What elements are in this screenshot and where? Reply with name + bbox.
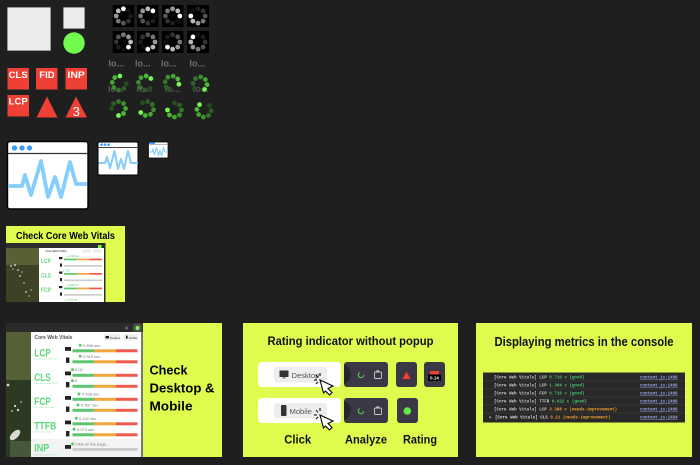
loading labels row 1: lo... [135, 58, 150, 68]
console log: content.js:1494 [640, 416, 678, 420]
loading labels row 2: lo... [193, 84, 208, 94]
console log: content.js:1496 [640, 376, 678, 380]
console log: content.js:1496 [640, 408, 678, 412]
metric values: 0.896 sec [83, 343, 100, 348]
icon: INP badge: INP [67, 70, 85, 80]
metrics popup: Core Web Vitals [34, 335, 73, 341]
metric labels: TTFB [34, 420, 56, 432]
icon: FID badge: FID [39, 70, 55, 80]
metric values: 0.457 sec [81, 402, 98, 408]
icon: CLS badge [8, 68, 29, 90]
panel: rating indicator without popup [243, 323, 458, 457]
metric values: 0.538 sec [82, 392, 99, 396]
loading labels row 2: lo... [164, 84, 180, 94]
metric sublabels [34, 358, 58, 456]
icon: LCP badge [8, 95, 29, 116]
icon: red triangle with number: 3 [73, 104, 80, 119]
panel: check core web vitals: CLS [41, 272, 51, 280]
icon: cursor on desktop button [314, 373, 333, 395]
console log: [Core Web Vitals] FCP 0.716 с (good) [494, 392, 584, 396]
panel: check core web vitals: ● 0.00 [63, 270, 70, 272]
label: rating: Rating [403, 434, 437, 446]
icon: red triangle [36, 96, 58, 118]
metric sublabels: Time to First Byte [34, 430, 52, 434]
icon: cursor on mobile button [314, 408, 333, 430]
caption: check desktop and mobile: Check [150, 362, 188, 378]
metric values: 0.142 sec [79, 416, 96, 421]
icon: small gray square [64, 8, 84, 28]
metrics popup: Desktop [110, 336, 121, 340]
panel: check core web vitals: FCP [41, 287, 51, 294]
caption: check desktop and mobile: Desktop & [150, 380, 214, 396]
loading labels row 1: lo... [161, 58, 176, 68]
console log: content.js:1496 [640, 392, 678, 396]
panel: check core web vitals: ● 0.538 sec [66, 284, 80, 287]
loading labels row 2: lo... [136, 84, 152, 94]
rating tile: green dot [397, 398, 418, 423]
icon: LCP badge: LCP [9, 96, 28, 106]
icon: INP badge [66, 68, 87, 90]
metric values [71, 343, 109, 446]
panel: displaying metrics in the console [476, 323, 692, 457]
metric labels: LCP [34, 348, 51, 360]
icon: small browser window [148, 142, 168, 158]
icon: FID badge [36, 68, 58, 90]
label: analyze: Analyze [345, 434, 387, 446]
white spinners grid [110, 2, 212, 56]
console log: content.js:1496 [640, 384, 678, 388]
metric labels [34, 348, 56, 454]
icon: CLS badge: CLS [9, 70, 28, 80]
heading: Rating indicator without popup [268, 334, 434, 348]
label: click: Click [284, 434, 312, 446]
toolbar analyzing mobile [344, 398, 388, 423]
mobile button [258, 398, 341, 423]
browser toolbar [6, 323, 143, 332]
device icons [65, 347, 71, 449]
mobile button: Mobile [290, 407, 312, 416]
metric sublabels: Cumulative Layout Shift [34, 382, 57, 385]
metric labels: INP [34, 442, 49, 454]
loading labels row 2 [108, 84, 208, 94]
metric values: Click on the page... [75, 442, 109, 446]
console log: [Core Web Vitals] LCP 0.716 с (good) [494, 376, 584, 380]
icon: red triangle with number [66, 96, 87, 119]
metric labels: FCP [34, 396, 51, 408]
loading labels row 1 [108, 58, 205, 68]
green spinners grid [109, 70, 217, 123]
icon: large gray square [8, 8, 50, 50]
loading labels row 1: lo... [190, 58, 205, 68]
metric sublabels: First Contentful Paint [34, 406, 55, 409]
icon: green circle [63, 32, 85, 54]
metrics popup: Mobile [129, 336, 138, 340]
console log: [Core Web Vitals] LCP 3.388 с (needs-improvement) [494, 408, 617, 412]
desktop button: Desktop [292, 371, 319, 380]
panel: check core web vitals: Core Web Vitals [46, 249, 67, 253]
icon: large browser window [8, 142, 88, 209]
heading: Check Core Web Vitals [16, 231, 115, 242]
rating tile: red triangle [396, 362, 417, 387]
metric bars [72, 349, 138, 451]
console log: [Core Web Vitals] LCP 1.304 с (good) [494, 384, 584, 388]
metric values: 0.073 sec [77, 427, 94, 432]
metric values: 0.00 [75, 367, 84, 372]
console log [483, 372, 685, 422]
icon: medium browser window [98, 142, 138, 175]
console log: [Core Web Vitals] CLS 0.21 (needs-improvement) [495, 416, 611, 420]
panel: check core web vitals: ● 0.142 sec [65, 298, 78, 302]
console log: [Core Web Vitals] TTFB 0.622 с (good) [494, 400, 587, 404]
console log: content.js:1496 [640, 400, 678, 404]
panel: check core web vitals: LCP [41, 258, 51, 265]
metric sublabels: Interaction to Next Paint [34, 454, 58, 456]
panel: check core web vitals: ● 0.896 sec [67, 255, 80, 258]
metric values: 0 [75, 378, 78, 383]
heading: Displaying metrics in the console [494, 335, 674, 349]
rating tile: value badge [424, 362, 445, 387]
loading labels row 1: lo... [108, 58, 124, 68]
caption: check desktop and mobile: Mobile [150, 398, 192, 414]
loading labels row 2: lo... [108, 84, 124, 94]
desktop button [258, 362, 341, 387]
panel: check core web vitals [6, 226, 125, 302]
page background photo [6, 332, 31, 457]
metrics popup [31, 332, 143, 457]
metric labels: CLS [34, 372, 51, 384]
rating tile: value badge: 0.14 [430, 376, 439, 381]
metric sublabels: Largest Contentful Paint [34, 358, 58, 360]
metric values: 0.919 sec [83, 354, 100, 359]
panel: check desktop and mobile [6, 323, 222, 457]
toolbar analyzing desktop [344, 362, 388, 387]
